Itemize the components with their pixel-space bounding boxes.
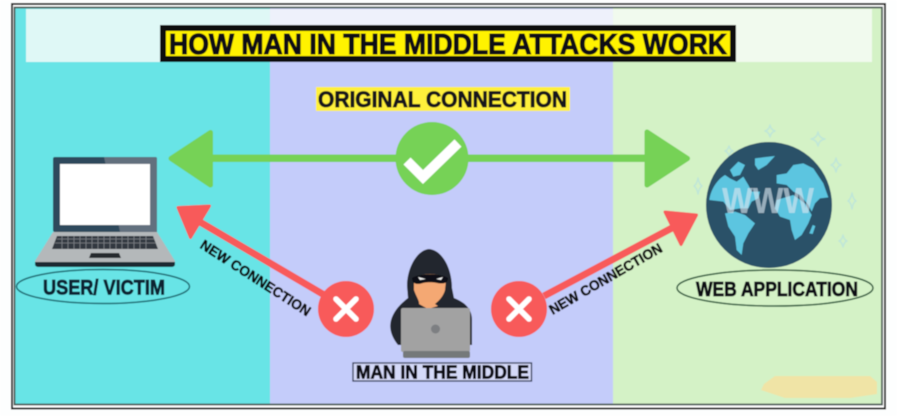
heading: original connection: ORIGINAL CONNECTION — [318, 87, 567, 112]
icon: green check — [396, 122, 468, 195]
icon: www globe — [706, 142, 832, 268]
icon: right red cross — [491, 281, 547, 337]
label: right new connection: NEW CONNECTION — [546, 240, 665, 318]
panel: user side background — [15, 8, 270, 404]
icon: hacker with laptop — [390, 249, 472, 358]
arrow: original connection double-headed — [171, 132, 688, 185]
smudge: covered watermark — [761, 376, 877, 398]
label: user / victim: USER/ VICTIM — [43, 276, 165, 300]
label: left new connection: NEW CONNECTION — [198, 236, 314, 319]
icon: victim laptop — [35, 157, 175, 267]
panel: attacker side background — [270, 8, 613, 404]
icon: left red cross — [318, 281, 374, 337]
continents — [709, 156, 828, 255]
label: web application: WEB APPLICATION — [696, 278, 858, 301]
title: HOW MAN IN THE MIDDLE ATTACKS WORK — [169, 29, 727, 61]
panel: web application side background — [613, 8, 882, 404]
label: user / victim — [16, 270, 190, 304]
arrow: right new connection — [544, 212, 696, 296]
decorative sparkles around globe — [694, 125, 856, 247]
title band — [26, 9, 872, 62]
label: web application — [677, 270, 873, 306]
www text: WWW — [722, 180, 814, 221]
arrow: left new connection — [178, 206, 326, 296]
label: man in the middle: MAN IN THE MIDDLE — [356, 362, 529, 382]
